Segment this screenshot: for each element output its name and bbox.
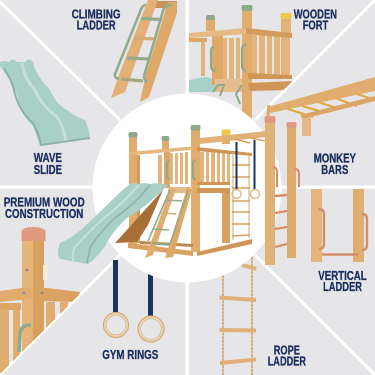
heading: wooden fort: FORT xyxy=(303,19,329,33)
slide ridges xyxy=(22,63,66,141)
back posts xyxy=(128,132,170,245)
panel: vertical ladder xyxy=(311,189,367,262)
ring straps xyxy=(116,260,150,318)
vertical ladder posts xyxy=(264,116,299,265)
panel: wooden fort xyxy=(189,5,292,118)
heading: climbing ladder xyxy=(72,7,121,33)
ladder green handrails xyxy=(115,5,172,82)
panel: premium wood construction xyxy=(0,227,80,373)
panel: central playset xyxy=(58,116,299,265)
ropes xyxy=(223,257,252,375)
ladder posts xyxy=(311,189,322,262)
heading: wave slide xyxy=(34,151,62,177)
heading: monkey bars xyxy=(314,151,357,177)
heading: climbing ladder: CLIMBING xyxy=(72,7,121,21)
heading: vertical ladder xyxy=(318,269,367,294)
wood rails xyxy=(0,287,80,302)
yellow post and monkey beam xyxy=(200,130,267,144)
fort green handles xyxy=(211,45,246,71)
heading: climbing ladder: LADDER xyxy=(77,19,116,33)
fort balusters xyxy=(201,35,290,85)
centre circle xyxy=(92,94,282,282)
panel: wave slide xyxy=(0,60,90,146)
heading: rope ladder: LADDER xyxy=(268,355,306,369)
salmon post cap xyxy=(22,227,46,241)
fort posts xyxy=(206,5,292,118)
pale accent behind post xyxy=(43,265,48,280)
slide body xyxy=(0,60,90,146)
heading: rope ladder xyxy=(268,343,306,369)
rings xyxy=(105,314,163,341)
panel: rope ladder xyxy=(220,257,256,375)
panel: monkey bars xyxy=(268,77,375,136)
bar rungs xyxy=(285,93,375,117)
heading: wave slide: SLIDE xyxy=(34,163,62,177)
bar support leg xyxy=(302,118,311,136)
fort green handles xyxy=(167,160,196,179)
base frame xyxy=(128,239,252,256)
heading: monkey bars: MONKEY xyxy=(314,151,357,165)
post bolts xyxy=(23,269,43,294)
wood post xyxy=(22,241,44,361)
main post and under-deck post xyxy=(190,125,230,252)
fort rails xyxy=(189,28,292,92)
heading: wooden fort: WOODEN xyxy=(294,7,337,21)
heading: wooden fort xyxy=(294,7,337,33)
central climbing ladder xyxy=(145,188,192,258)
slide support xyxy=(115,190,163,243)
heading: gym rings: GYM RINGS xyxy=(102,348,158,362)
panel: climbing ladder xyxy=(111,0,177,102)
ladder rails xyxy=(111,0,177,102)
heading: vertical ladder: LADDER xyxy=(323,280,362,294)
rope rungs xyxy=(220,265,256,363)
rope ladder xyxy=(232,155,250,240)
gym ring straps and rings xyxy=(232,140,260,198)
heading: premium wood construction: CONSTRUCTION xyxy=(5,207,83,221)
fort ladder top xyxy=(213,85,242,104)
fort balusters xyxy=(158,152,230,188)
salmon bars and handles xyxy=(318,209,367,254)
panel: gym rings xyxy=(105,260,163,341)
heading: wave slide: WAVE xyxy=(34,151,62,165)
slide xyxy=(58,183,168,264)
heading: premium wood construction xyxy=(4,196,85,221)
ladder rungs xyxy=(121,18,162,81)
fort rails xyxy=(129,146,252,193)
heading: premium wood construction: PREMIUM WOOD xyxy=(4,196,85,210)
green handle xyxy=(19,325,31,352)
wood balusters xyxy=(0,302,68,373)
bar side rails xyxy=(268,77,375,113)
heading: monkey bars: BARS xyxy=(321,163,348,177)
heading: rope ladder: ROPE xyxy=(274,343,300,357)
fort slide remnant xyxy=(189,77,217,92)
